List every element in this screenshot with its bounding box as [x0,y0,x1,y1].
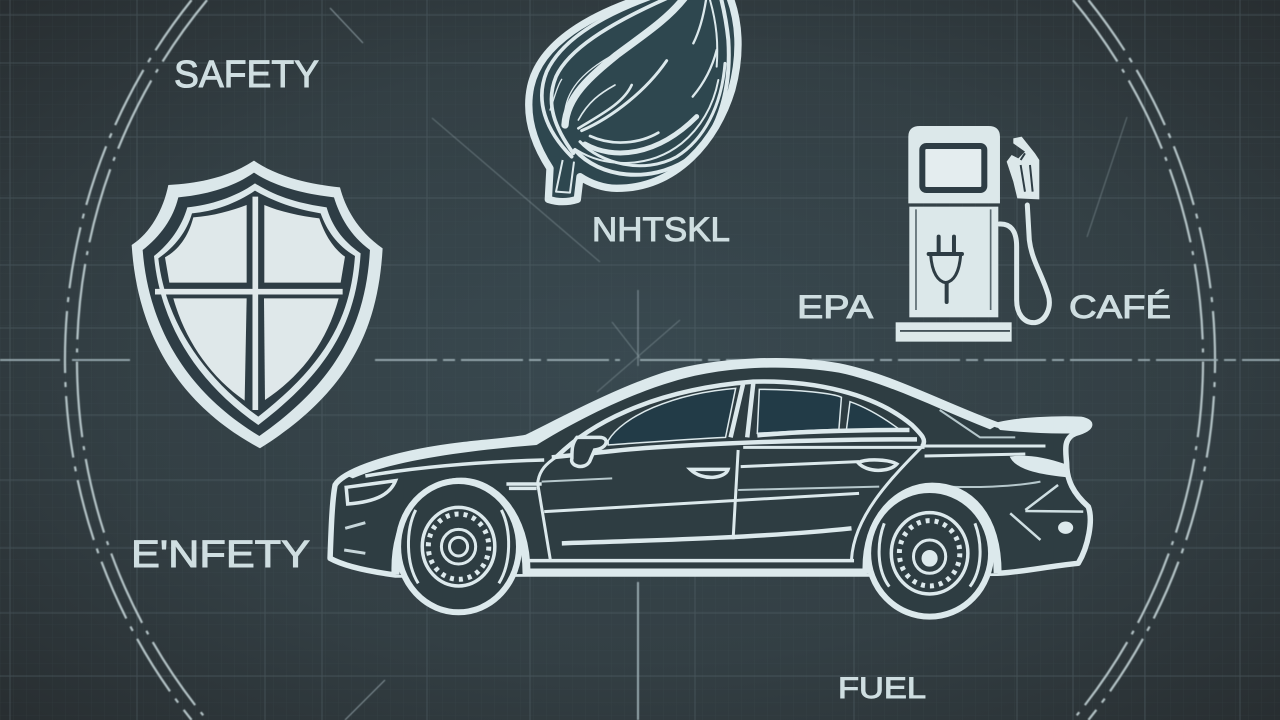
hood band [345,437,537,478]
shield cross [155,197,343,410]
icon: leaf [525,0,742,206]
plug symbol [929,237,962,302]
label: CAFÉ: CAFÉ [1069,289,1171,325]
rear window [757,389,841,433]
label: NHTSKL: NHTSKL [592,211,730,249]
rear wheel arch [866,487,998,574]
sill [529,559,854,562]
door handles [690,460,897,477]
headlight [346,481,396,504]
pump body [909,207,998,317]
icon: EV fuel pump [896,126,1049,342]
side mirror [572,437,606,466]
front wheel arch [395,482,527,575]
quarter window [846,402,899,429]
roofline band [524,360,998,445]
rear reflector [1058,521,1074,534]
hose [999,205,1049,323]
pump screen [922,146,984,190]
icon: shield [132,161,383,448]
illustration: sedan outline [330,360,1092,617]
shield quadrants [165,205,345,401]
leaf midrib [565,0,684,125]
front window [608,388,736,445]
spoiler band [995,418,1092,433]
heading: SAFETY: SAFETY [174,54,319,96]
rear wheel [868,490,991,617]
label: EPA: EPA [797,289,874,325]
label: E'NFETY: E'NFETY [131,534,310,576]
pump base [896,322,1012,342]
hood and fender lines [365,460,544,488]
label: FUEL: FUEL [838,672,926,705]
tail light [1011,457,1065,476]
pump head [908,126,1000,203]
door lines [538,447,922,559]
pillars and window frame [557,382,924,457]
leaf inner contour lines [542,0,729,175]
car body [330,361,1090,575]
front wheel [398,481,519,612]
nozzle [1007,137,1039,199]
leaf stem [556,160,574,193]
